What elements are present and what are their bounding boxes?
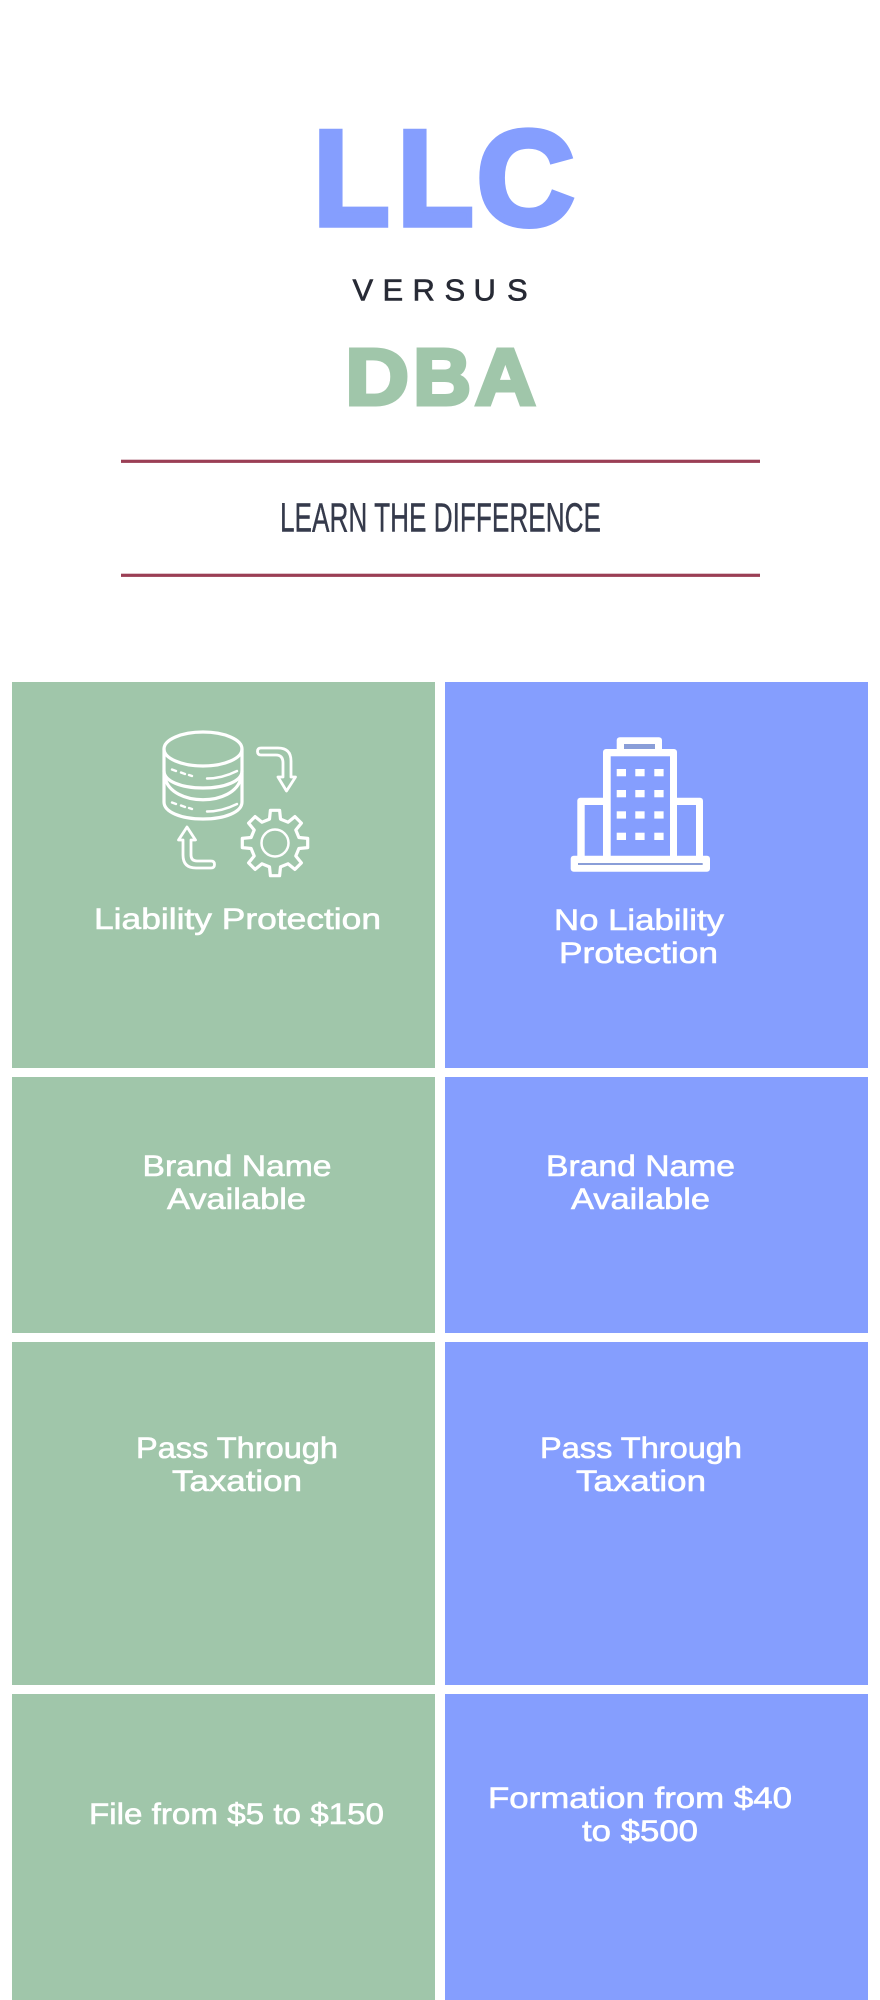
title: DBA: B — [413, 333, 471, 422]
label: no liability protection: Protection — [559, 937, 718, 970]
label: brand name available: Available — [167, 1183, 306, 1216]
label: pass through taxation: Pass Through — [540, 1432, 742, 1465]
label: brand name available — [142, 1150, 332, 1216]
title: DBA: D — [345, 333, 409, 422]
label: pass through taxation — [540, 1432, 742, 1498]
title: LLC — [314, 103, 574, 254]
title: LLC: C — [477, 103, 574, 254]
panel: DBA taxation — [445, 1342, 868, 1685]
panel: LLC filing cost — [12, 1694, 435, 2000]
label: formation cost: to $500 — [582, 1815, 698, 1848]
label: pass through taxation: Taxation — [576, 1465, 706, 1498]
panel: LLC brand name — [12, 1077, 435, 1333]
tagline block with rules — [121, 460, 760, 577]
title: LLC: L — [398, 103, 473, 254]
label: formation cost — [488, 1782, 792, 1848]
label: brand name available — [546, 1150, 735, 1216]
label: liability protection: Liability Protection — [94, 903, 381, 936]
label: pass through taxation — [136, 1432, 338, 1498]
label: no liability protection — [554, 904, 724, 970]
panel: LLC liability protection — [12, 682, 435, 1068]
title: DBA — [345, 333, 536, 422]
panel: DBA formation cost — [445, 1694, 868, 2000]
label: brand name available: Brand Name — [142, 1150, 332, 1183]
panel: DBA brand name — [445, 1077, 868, 1333]
label: brand name available: Available — [571, 1183, 710, 1216]
label: pass through taxation: Taxation — [172, 1465, 302, 1498]
label: pass through taxation: Pass Through — [136, 1432, 338, 1465]
label: brand name available: Brand Name — [546, 1150, 735, 1183]
label: no liability protection: No Liability — [554, 904, 724, 937]
title: LLC: L — [314, 103, 389, 254]
label: formation cost: Formation from $40 — [488, 1782, 792, 1815]
panel: DBA no liability protection — [445, 682, 868, 1068]
title: DBA: A — [475, 333, 536, 422]
tagline: LEARN THE DIFFERENCE — [280, 494, 601, 540]
header — [121, 103, 760, 577]
icon: office building — [571, 737, 710, 872]
subtitle: versus: VERSUS — [352, 273, 528, 308]
panel: LLC taxation — [12, 1342, 435, 1685]
icon: database and gear — [164, 732, 308, 876]
label: file cost: File from $5 to $150 — [89, 1798, 384, 1831]
